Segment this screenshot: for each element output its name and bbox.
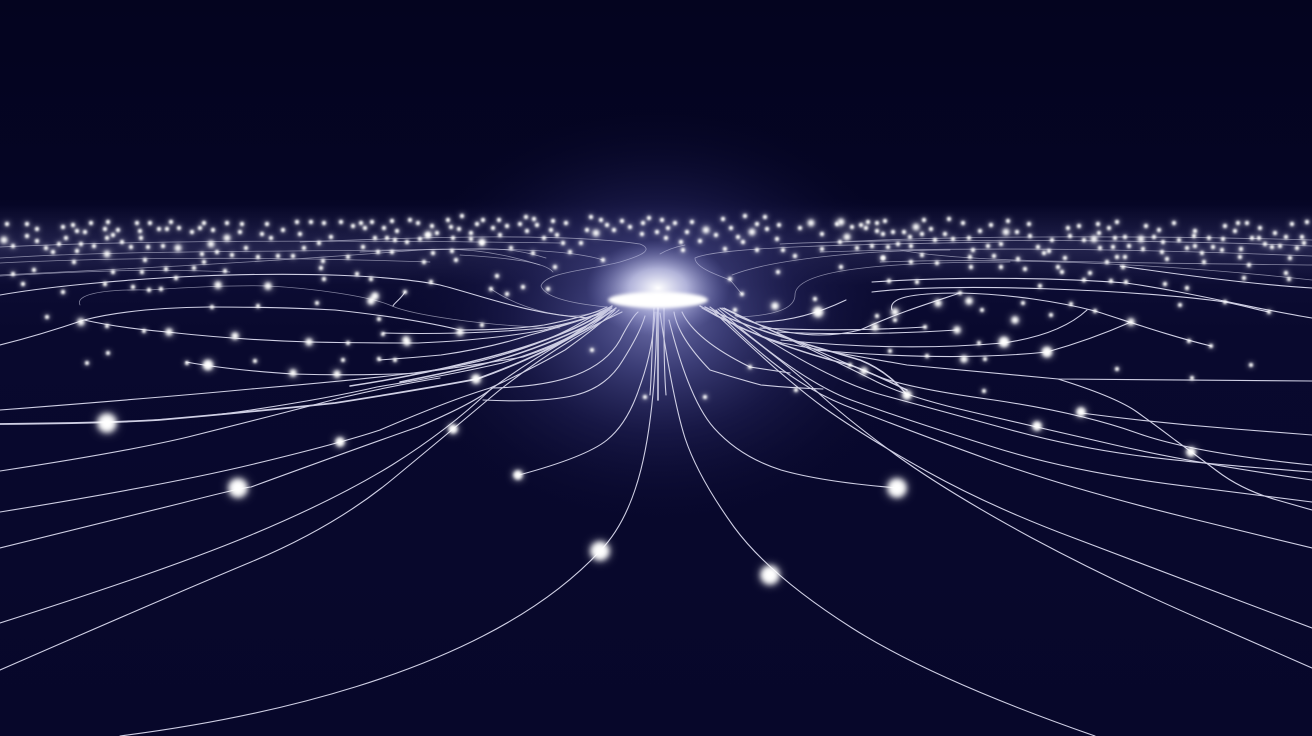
- upper spiral streams: [300, 237, 1010, 317]
- horizon glow band: [0, 205, 1312, 285]
- foreground nodes: [107, 379, 1191, 575]
- hub disc: [608, 292, 708, 308]
- right fan of streams: [660, 307, 1312, 736]
- distant star-like nodes: [4, 216, 1307, 325]
- mid-field nodes: [47, 285, 1269, 397]
- horizontal streams near the horizon: [0, 237, 1312, 280]
- hub halo: [586, 240, 730, 336]
- bright bundle beneath the hub: [350, 306, 907, 400]
- left loop streams: [0, 270, 612, 375]
- central halo: [393, 108, 923, 528]
- right loop streams: [735, 266, 1312, 357]
- left fan of streams: [0, 306, 657, 736]
